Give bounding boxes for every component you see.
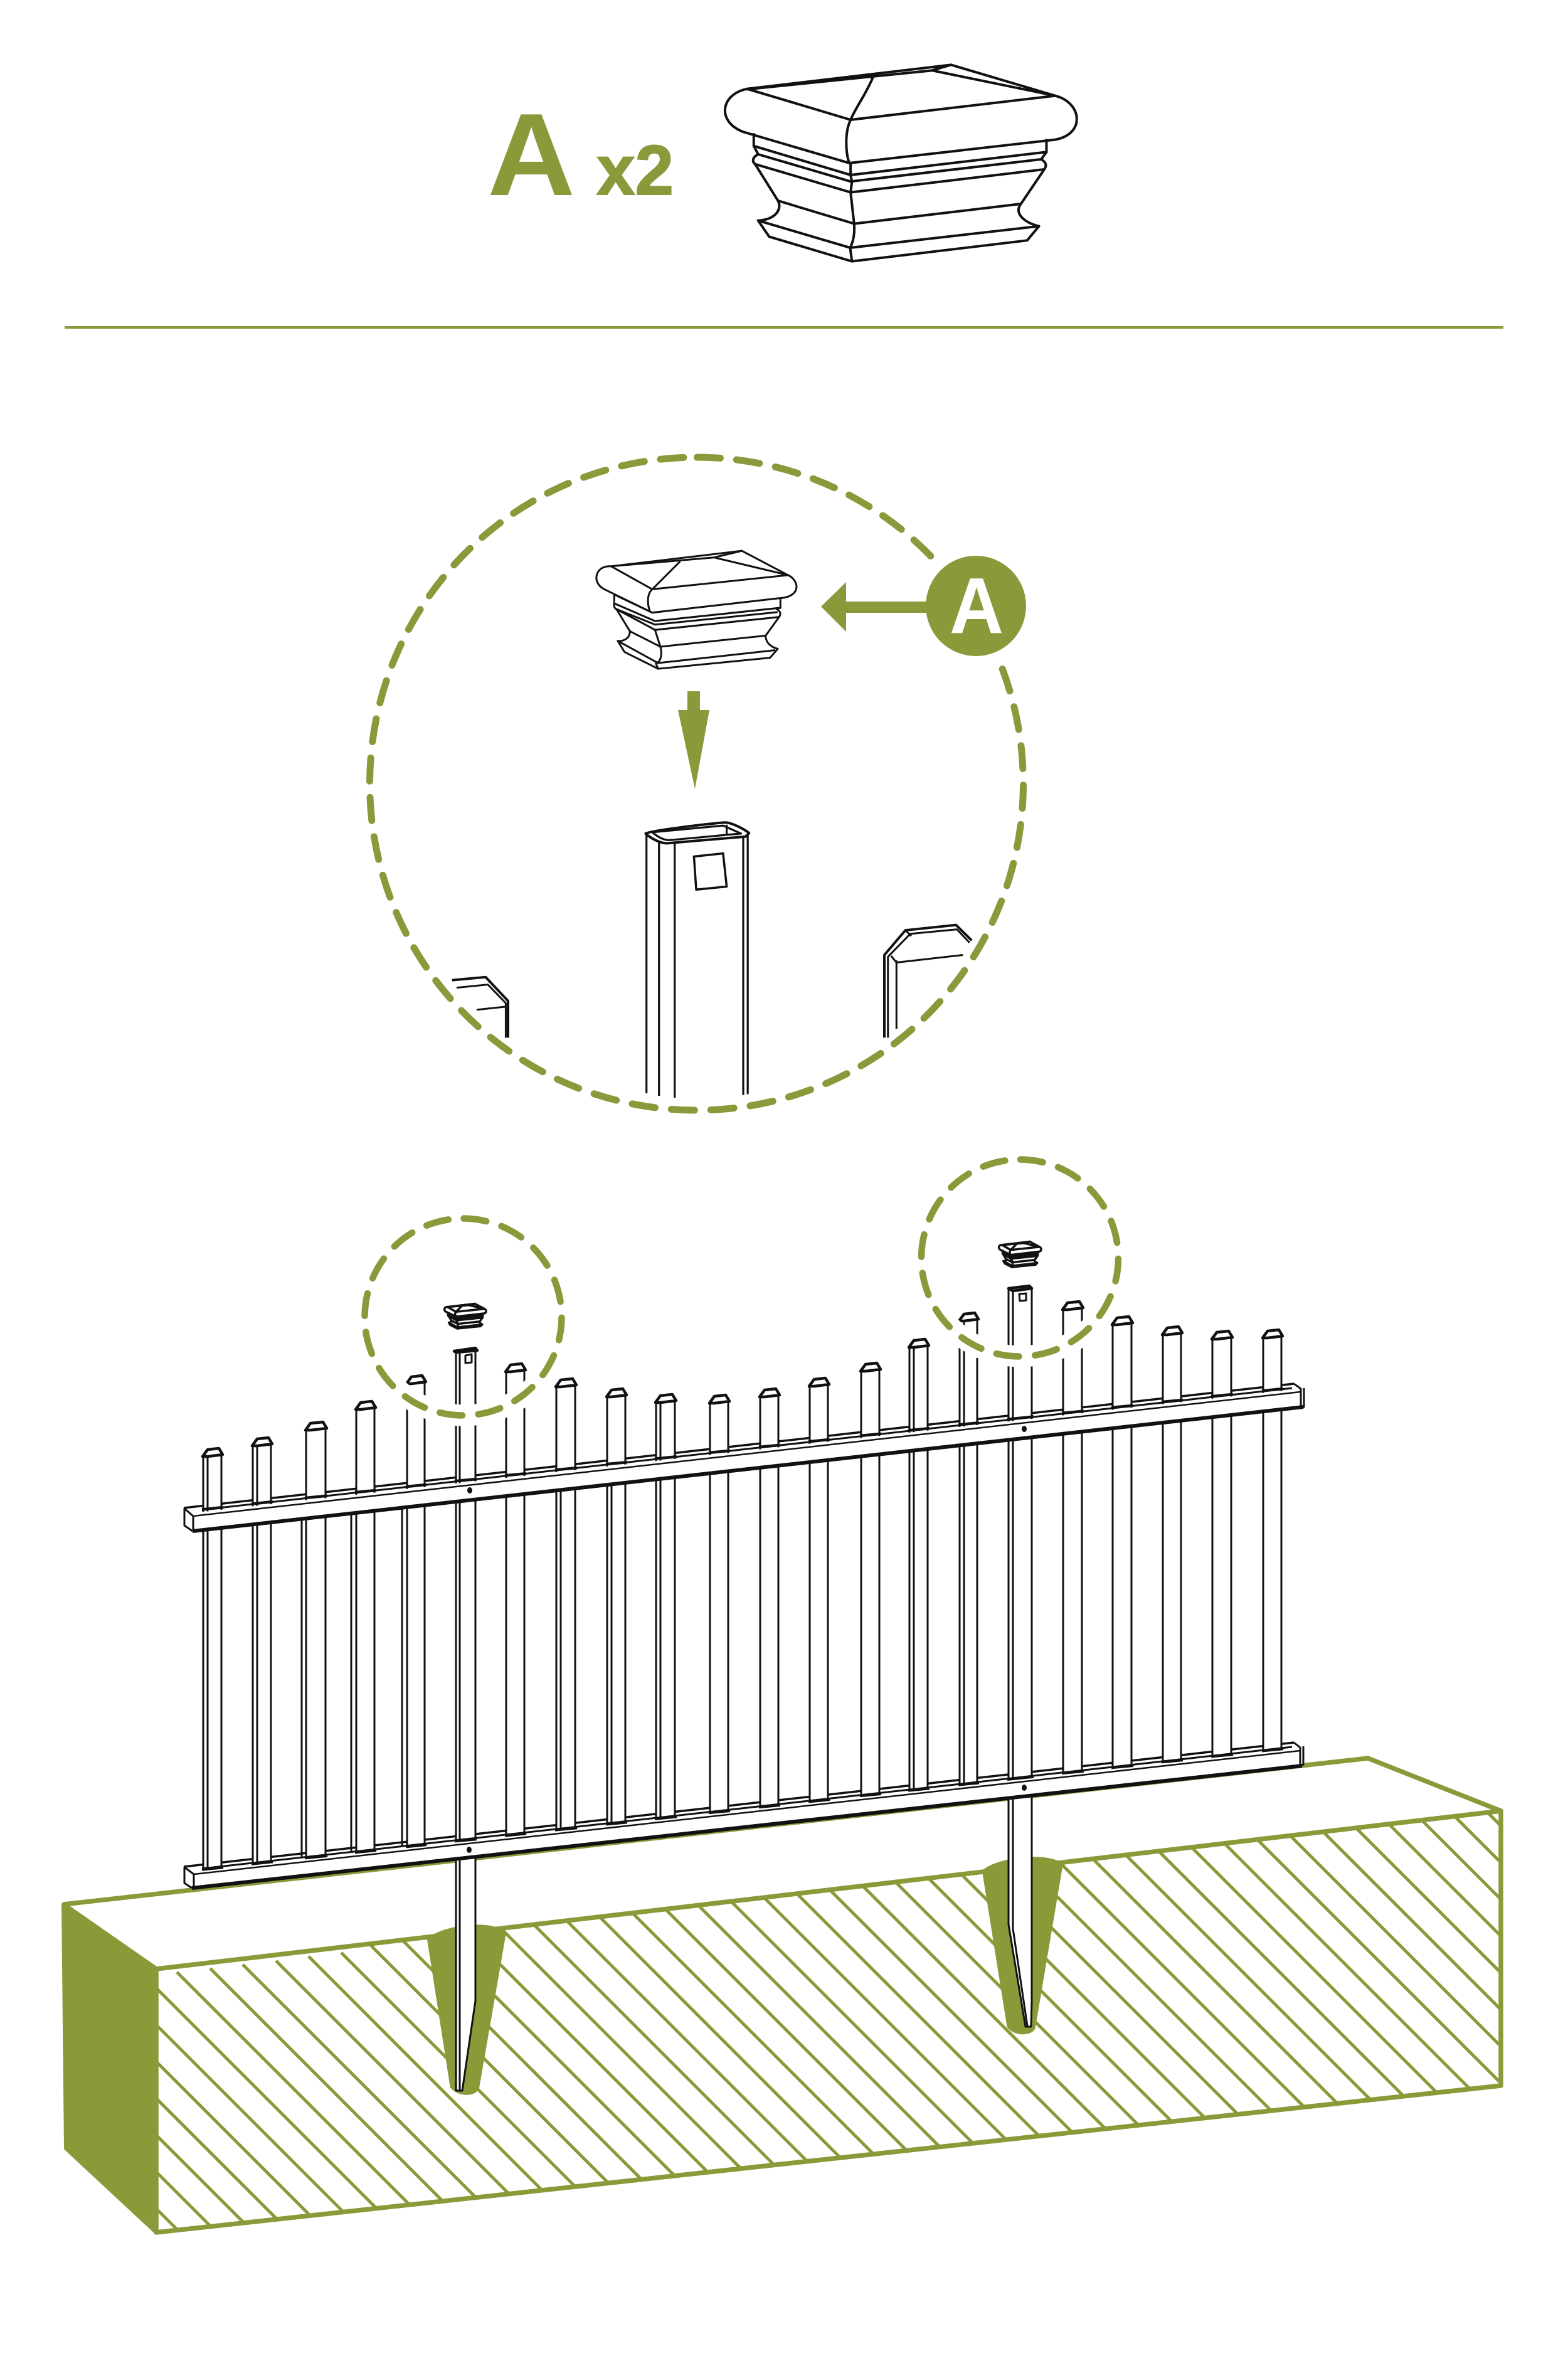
icon: large post cap [725, 65, 1077, 262]
fence panel [184, 1286, 1304, 2091]
rail back edges [184, 1384, 1294, 1867]
dashed detail circle outline [370, 457, 1023, 1110]
ground hatching [156, 1813, 1501, 2230]
post right [1009, 1286, 1032, 2027]
callout circle right [921, 1159, 1119, 1356]
callout circle left [365, 1218, 563, 1415]
divider line [65, 326, 1503, 329]
picket fragment left [452, 977, 508, 1037]
icon: small cap left [445, 1303, 486, 1329]
post left [454, 1348, 477, 2091]
icon: small cap right [999, 1241, 1041, 1267]
panel: detail circle [370, 457, 1040, 1110]
icon: post cap in detail view [596, 551, 797, 669]
post top detail [645, 822, 749, 1098]
white gap around badge [912, 542, 1040, 670]
bottom rail [184, 1743, 1303, 1888]
picket fragment right [884, 925, 972, 1037]
arrow: from badge to cap [821, 582, 928, 632]
concrete hole left [427, 1924, 506, 2095]
top rail [184, 1384, 1304, 1532]
ground block [63, 1758, 1501, 2232]
quantity label: A x2: A [487, 89, 575, 220]
badge A: A [950, 561, 1004, 650]
ground side face [63, 1904, 156, 2232]
ground outlines [63, 1758, 1501, 2232]
quantity label: A x2: x2 [596, 131, 674, 210]
concrete hole right [982, 1857, 1063, 2034]
badge A [926, 556, 1026, 656]
pickets [203, 1308, 1281, 1869]
quantity label: A x2 [487, 89, 674, 220]
picket caps [203, 1302, 1283, 1456]
arrow: down onto post [678, 691, 709, 789]
